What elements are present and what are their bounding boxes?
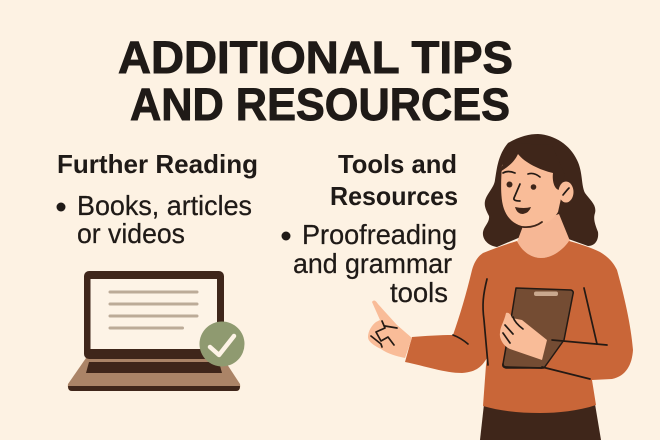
heading: tools and resources: Tools and (338, 149, 457, 179)
face (500, 143, 574, 227)
icon: laptop with check badge (68, 271, 244, 391)
hair fringe (500, 143, 565, 190)
text block: further reading bullet (56, 190, 252, 249)
text block: tools bullet (282, 219, 457, 308)
text block: tools bullet: Proofreading (302, 219, 457, 250)
hair (483, 134, 598, 247)
title: ADDITIONAL TIPS (118, 32, 513, 83)
sweater (405, 241, 633, 413)
sweater fold lines (453, 279, 607, 379)
holding hand (500, 313, 547, 360)
text block: further reading bullet: Books, articles (77, 190, 252, 221)
check badge (200, 322, 244, 366)
skirt (480, 404, 601, 440)
laptop screen (84, 271, 224, 359)
title: AND RESOURCES (130, 79, 510, 130)
keyboard (86, 362, 222, 373)
illustration: woman holding tablet (368, 134, 633, 440)
eyes and brows (506, 182, 512, 188)
title (118, 32, 513, 130)
jaw line (523, 222, 542, 227)
heading: tools and resources (330, 149, 458, 211)
heading: further reading: Further Reading (57, 149, 258, 179)
neck (517, 214, 570, 258)
text block: tools bullet: tools (390, 277, 448, 308)
nose (514, 184, 520, 201)
ear (558, 182, 574, 202)
pointing hand (368, 301, 412, 358)
tablet (503, 288, 573, 368)
text block: tools bullet: and grammar (293, 248, 452, 279)
laptop base (68, 358, 240, 391)
mouth (515, 207, 531, 214)
text block: further reading bullet: or videos (77, 218, 185, 249)
heading: tools and resources: Resources (330, 181, 458, 211)
text lines (108, 290, 198, 330)
